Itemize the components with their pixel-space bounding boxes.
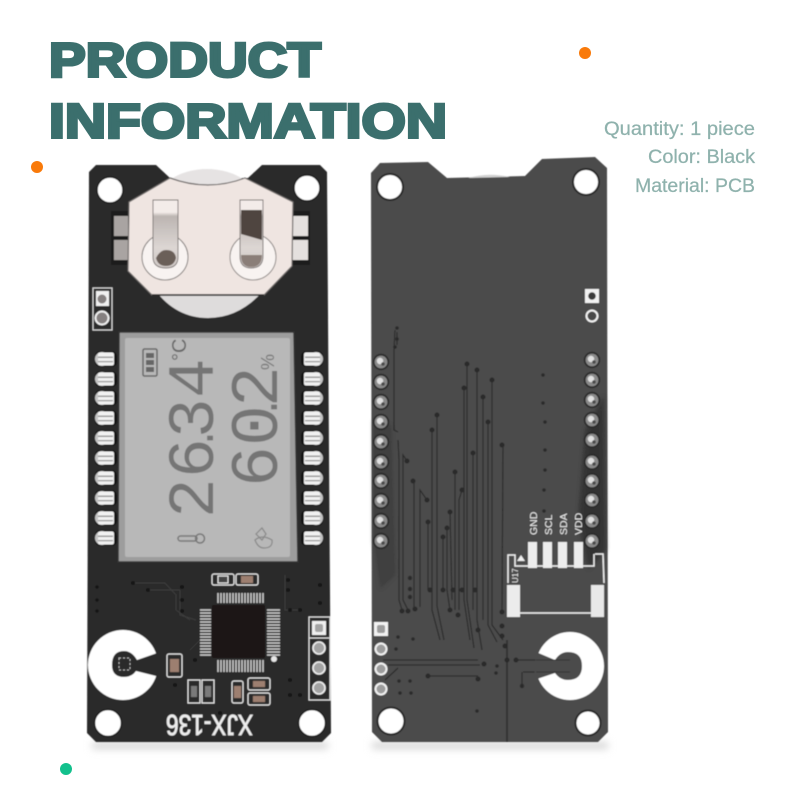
connector pin labels: SCL: [543, 514, 555, 535]
model silkscreen: XJX-136: [166, 708, 253, 740]
battery holder: [128, 178, 293, 295]
decorative dot: green bottom: [60, 763, 72, 775]
panel: front of PCB: [87, 165, 331, 742]
two pin header silk: [93, 288, 112, 330]
coin cell peek: [468, 175, 510, 178]
back sensor cut-out: [534, 632, 604, 700]
title: PRODUCT: [49, 34, 321, 88]
front board outline: [87, 165, 331, 742]
LCD humidity reading: .: [245, 395, 290, 419]
U17 connector footprint: U17: [511, 568, 520, 583]
decorative dot: orange top: [579, 47, 591, 59]
LCD battery icon: [143, 349, 157, 376]
four pin connector: [309, 617, 330, 700]
connector pin labels: [528, 511, 585, 535]
back traces: [383, 330, 570, 742]
specifications text: [604, 118, 755, 197]
LCD thermometer icon: [178, 534, 204, 543]
solder pads of battery holder: [111, 211, 310, 265]
connector pin labels: SDA: [558, 513, 570, 535]
coin cell battery: [155, 169, 264, 318]
connector pin labels: GND: [528, 511, 540, 535]
U17 connector footprint: [507, 542, 604, 617]
back board outline: [371, 157, 608, 742]
title: [49, 34, 447, 148]
back side pins right: [584, 352, 600, 549]
specifications text: Material: PCB: [635, 175, 755, 197]
LCD temperature reading: 3: [158, 398, 233, 438]
connector pin labels: VDD: [573, 512, 585, 535]
specifications text: Color: Black: [648, 146, 755, 168]
back vias: [393, 326, 550, 713]
LCD comfort icon: [255, 528, 272, 548]
front vias: [95, 578, 322, 715]
LCD humidity reading: 2: [221, 366, 298, 407]
two pin pads: [585, 289, 599, 322]
microcontroller chip: [200, 593, 280, 672]
front side pins left: [95, 351, 117, 546]
LCD percent symbol: %: [258, 354, 278, 370]
board shadows: [92, 742, 608, 749]
specifications text: Quantity: 1 piece: [604, 118, 755, 140]
four pin pads: [374, 622, 388, 694]
LCD temperature reading: .: [181, 426, 226, 450]
back side pins left: [373, 354, 389, 549]
LCD temperature reading: 6: [158, 438, 233, 478]
LCD temperature reading: 2: [158, 478, 233, 518]
LCD humidity reading: 6: [221, 446, 298, 487]
LCD degree symbol: °C: [169, 339, 191, 361]
front traces: [133, 575, 300, 650]
decorative dot: orange left: [31, 161, 43, 173]
solder residue: [373, 395, 606, 590]
front side pins right: [301, 351, 323, 546]
back mounting holes: [377, 169, 600, 736]
LCD temperature reading: 4: [158, 358, 233, 398]
LCD humidity reading: 0: [221, 405, 298, 446]
panel: back of PCB: [371, 157, 608, 742]
title: INFORMATION: [49, 96, 447, 148]
surface mount components: [167, 574, 270, 705]
LCD display: [118, 332, 298, 562]
sensor cut-out: [88, 630, 160, 700]
mounting holes: [94, 175, 326, 736]
